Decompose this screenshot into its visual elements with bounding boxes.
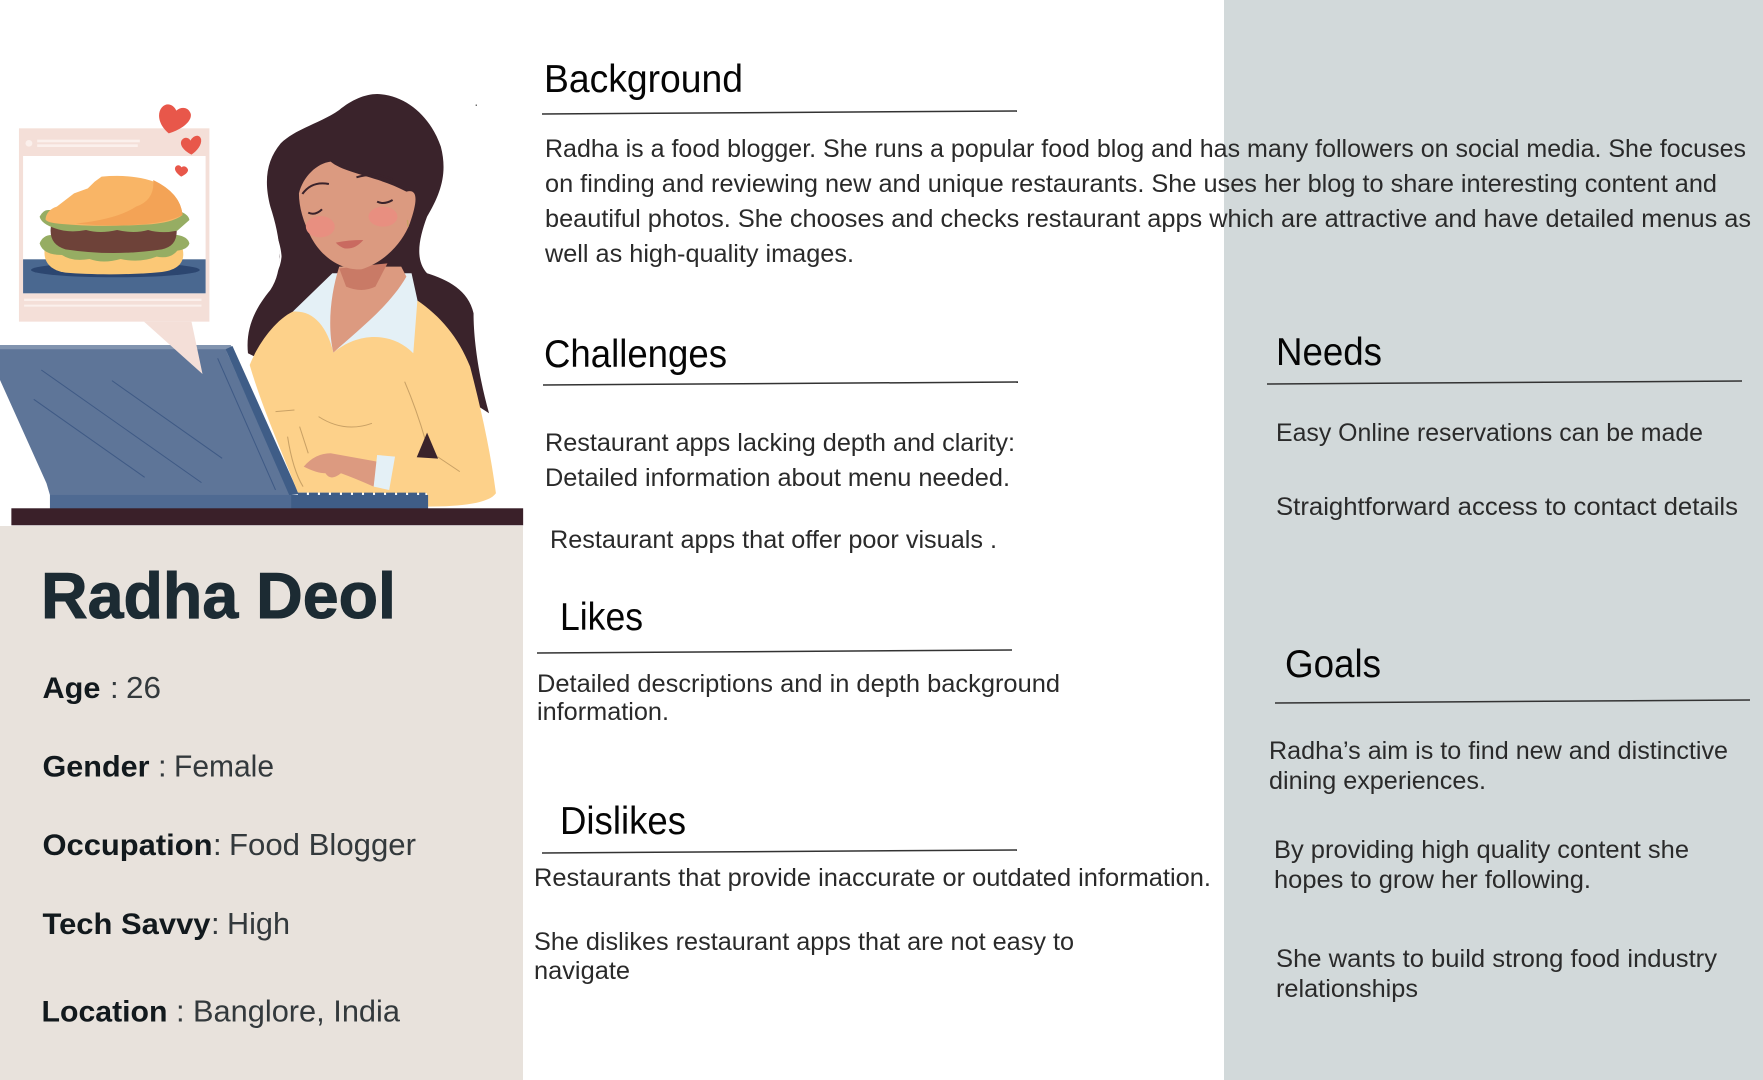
occupation: Occupation (42, 829, 212, 862)
heading: Likes (560, 596, 643, 639)
paragraph: on finding and reviewing new and unique restaurants. She uses her blog to share interesting content and (545, 170, 1717, 198)
mouth (336, 240, 363, 249)
occupation: : (213, 827, 222, 862)
earring (405, 220, 410, 227)
gender: Gender (42, 750, 150, 784)
section: goals (1269, 643, 1750, 1003)
arm gap (417, 433, 438, 459)
text: She dislikes restaurant apps that are not easy to (534, 928, 1074, 956)
text: Detailed descriptions and in depth background (537, 670, 1060, 698)
section: dislikes (534, 800, 1211, 985)
text: Easy Online reservations can be made (1276, 419, 1703, 447)
text: dining experiences. (1269, 767, 1486, 795)
section: background (542, 58, 1751, 268)
location (42, 994, 401, 1028)
keyboard (291, 494, 428, 509)
neck and chest (330, 267, 406, 353)
paragraph (544, 135, 1751, 268)
panel: profile card (0, 526, 523, 1080)
age (42, 670, 161, 705)
location: Banglore, India (193, 994, 401, 1028)
gender: : (158, 748, 167, 784)
age: : (110, 670, 119, 705)
text (1269, 737, 1728, 1003)
items: Restaurant apps lacking depth and clarity: (545, 429, 1015, 457)
tech savvy: : (211, 906, 220, 941)
text: She wants to build strong food industry (1276, 945, 1718, 973)
heading: Challenges (544, 333, 727, 376)
name: Radha Deol (41, 559, 396, 632)
age: 26 (126, 670, 161, 705)
text (537, 670, 1060, 726)
items (545, 429, 1015, 554)
section: challenges (543, 333, 1018, 554)
text: hopes to grow her following. (1274, 866, 1591, 894)
hearts (159, 104, 201, 177)
text: Restaurants that provide inaccurate or outdated information. (534, 864, 1211, 892)
heading: Goals (1285, 643, 1381, 686)
laptop (0, 345, 299, 509)
location: : (176, 994, 185, 1028)
hair highlight strand (251, 173, 281, 317)
eyes and brows (302, 175, 393, 214)
text: relationships (1276, 975, 1418, 1003)
text: By providing high quality content she (1274, 836, 1689, 864)
age: Age (42, 672, 100, 705)
heading: Background (544, 58, 743, 101)
speech bubble tail over laptop (144, 322, 203, 374)
social post card (19, 128, 209, 322)
items: Restaurant apps that offer poor visuals . (550, 526, 997, 554)
location: Location (42, 996, 168, 1028)
gender (42, 748, 274, 784)
text: navigate (534, 957, 630, 985)
gender: Female (174, 748, 274, 784)
section: needs (1267, 331, 1742, 521)
text: Radha’s aim is to find new and distinctive (1269, 737, 1728, 765)
cuff (374, 455, 395, 490)
speck (476, 104, 477, 107)
tech savvy: Tech Savvy (42, 908, 211, 941)
hand (304, 453, 377, 487)
heading: Needs (1276, 331, 1382, 374)
text (534, 864, 1211, 985)
occupation (42, 827, 416, 862)
occupation: Food Blogger (229, 827, 416, 862)
panel: right column background (1224, 0, 1763, 1080)
illustration: woman blogging with burger post (0, 94, 523, 525)
section: likes (537, 596, 1060, 726)
text (1276, 419, 1738, 521)
sleeve folds (276, 382, 460, 487)
items: Detailed information about menu needed. (545, 464, 1010, 492)
paragraph: well as high-quality images. (544, 240, 854, 268)
burger (31, 176, 200, 277)
hair (248, 94, 489, 413)
tech savvy: High (227, 906, 290, 941)
tech savvy (42, 906, 290, 941)
collar (293, 273, 417, 353)
text: information. (537, 698, 669, 726)
sweater (250, 300, 496, 507)
face (299, 162, 416, 269)
cheeks (306, 207, 397, 237)
desk (11, 508, 523, 525)
paragraph: beautiful photos. She chooses and checks restaurant apps which are attractive and have detailed menus as (545, 205, 1751, 233)
heading: Dislikes (560, 800, 686, 843)
text: Straightforward access to contact details (1276, 493, 1738, 521)
paragraph: Radha is a food blogger. She runs a popular food blog and has many followers on social media. She focuses (545, 135, 1746, 163)
